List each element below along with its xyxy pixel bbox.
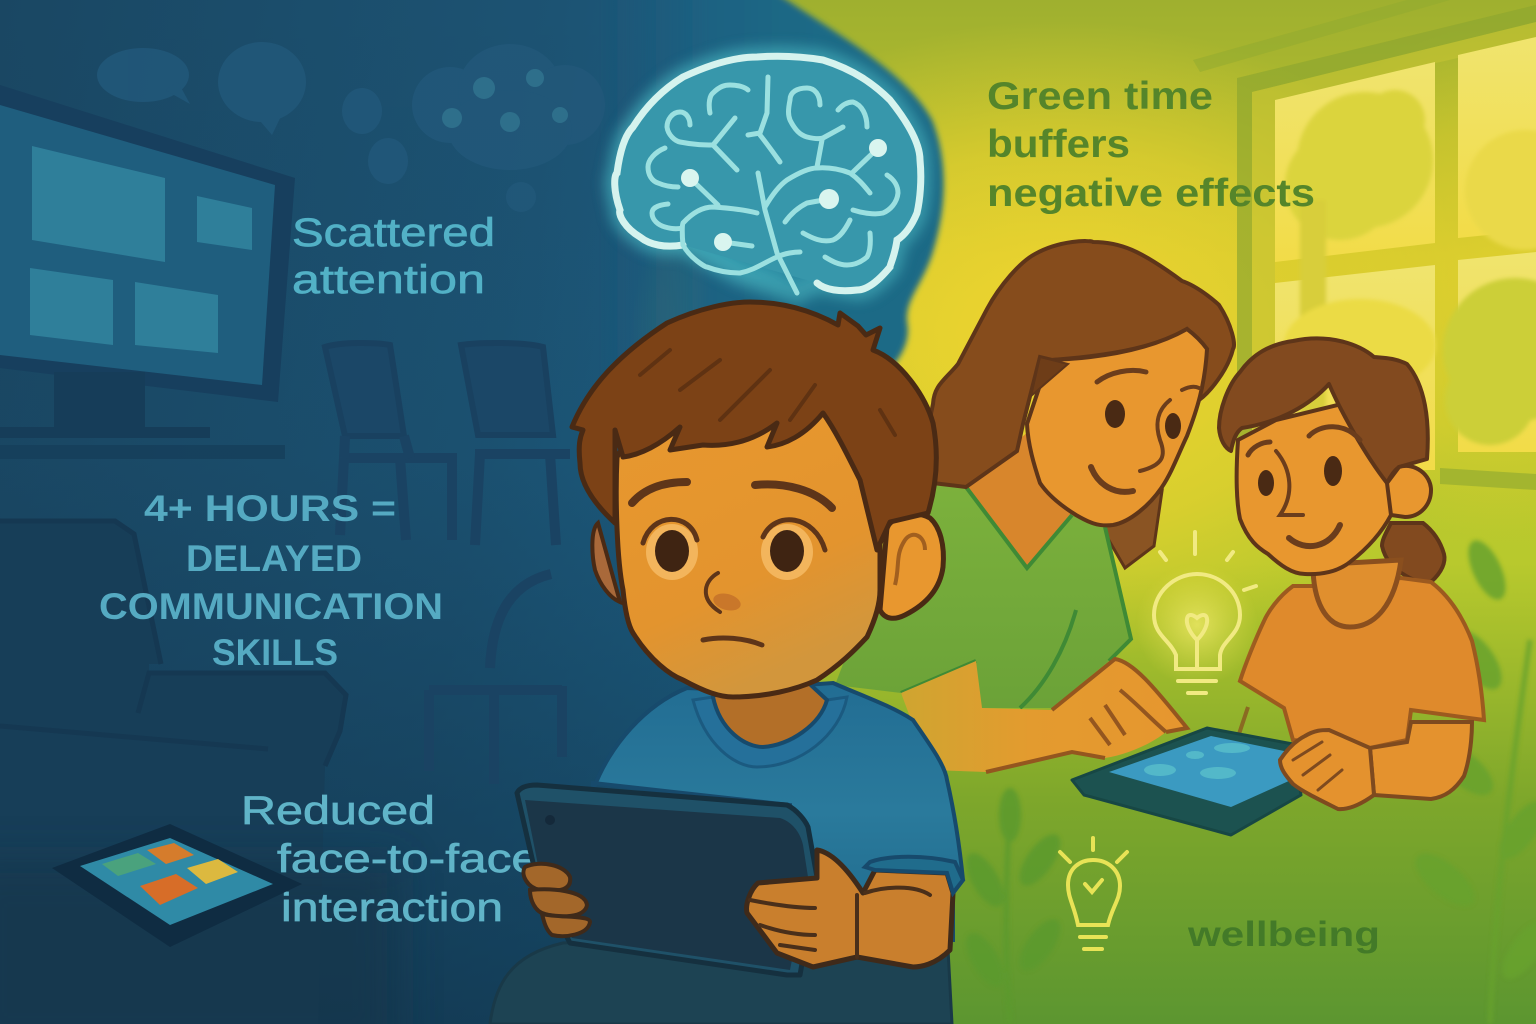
text: scattered attention	[292, 211, 495, 302]
girl: hand over tablet	[1280, 730, 1374, 809]
mother: face	[1027, 329, 1207, 525]
text: reduced face-to-face interaction	[241, 789, 539, 930]
garden trees	[1284, 90, 1536, 480]
brain: nodes	[681, 139, 887, 251]
mother: shirt	[835, 483, 1131, 708]
mother	[835, 241, 1234, 772]
shared tablet	[1072, 728, 1301, 835]
text: scattered attention: attention	[292, 258, 485, 302]
mother: eyes	[1105, 400, 1181, 439]
text: 4+ hours delayed communication skills	[99, 488, 443, 673]
window sill	[1440, 468, 1536, 490]
text: green time buffers negative effects	[987, 75, 1315, 215]
boy: collar	[693, 697, 847, 767]
boy: left ear	[592, 523, 620, 602]
television screen panels	[30, 146, 252, 353]
text: reduced face-to-face interaction: face-to-face	[277, 837, 539, 881]
thought bubbles	[97, 42, 605, 212]
girl: neck and collar	[1313, 560, 1401, 627]
brain: folds	[648, 77, 898, 293]
icon: glowing brain	[615, 56, 921, 293]
window with garden view	[1193, 0, 1536, 490]
mother: brows, nose, mouth	[1091, 370, 1199, 492]
window beam	[1193, 0, 1450, 72]
girl: face	[1237, 400, 1395, 574]
mother: back hair right	[1100, 491, 1162, 568]
left room: television	[0, 85, 295, 459]
bubble dots	[442, 69, 568, 132]
icon: tablet on the table	[52, 824, 302, 947]
text: green time buffers negative effects: buffers	[987, 123, 1130, 166]
boy: shirt	[593, 683, 963, 940]
background: dark blue side	[0, 0, 900, 1024]
left room: sofa	[0, 521, 400, 1024]
left room: chairs	[325, 343, 570, 784]
text: 4+ hours delayed communication skills: COMMUNICATION	[99, 586, 443, 627]
mother: hair	[928, 241, 1234, 487]
boy: eyebrows	[632, 482, 832, 508]
plants	[959, 535, 1536, 1024]
girl: eyes	[1258, 456, 1342, 496]
girl: hair	[1219, 338, 1428, 483]
boy	[490, 302, 963, 1024]
icon: lightbulb near wellbeing	[1060, 838, 1127, 949]
boy: legs	[490, 930, 952, 1024]
boy: hair	[572, 302, 936, 550]
text: green time buffers negative effects: negative effects	[987, 172, 1315, 215]
girl	[1219, 338, 1484, 799]
text: wellbeing: wellbeing	[1187, 915, 1380, 954]
girl: ear	[1387, 466, 1431, 517]
window panes	[1275, 37, 1536, 470]
boy: neck	[713, 675, 827, 747]
text: reduced face-to-face interaction: Reduced	[241, 789, 435, 833]
boy: right arm and hand	[747, 850, 963, 967]
blue silhouette behind brain	[600, 0, 944, 400]
text: 4+ hours delayed communication skills: SKILLS	[212, 632, 338, 673]
boy: mouth	[703, 638, 762, 645]
boy: head	[616, 400, 880, 697]
girl: arm	[1370, 722, 1472, 799]
text: reduced face-to-face interaction: interaction	[281, 886, 503, 930]
text: green time buffers negative effects: Green time	[987, 75, 1213, 118]
girl: shirt	[1240, 578, 1484, 748]
girl: brows, nose, mouth	[1248, 427, 1360, 546]
text: 4+ hours delayed communication skills: DELAYED	[186, 538, 362, 579]
girl: ponytail	[1382, 523, 1444, 582]
boy: left hand	[523, 864, 590, 936]
television stand	[0, 372, 210, 438]
background: bright green side	[630, 0, 1536, 1024]
text: 4+ hours delayed communication skills: 4+ HOURS =	[144, 488, 396, 529]
boy: eyes	[643, 519, 825, 580]
mother: neck	[966, 430, 1072, 568]
boy: nose	[706, 573, 743, 613]
boy: tablet	[517, 785, 817, 975]
text: scattered attention: Scattered	[292, 211, 495, 255]
mother: arm and pointing hand	[901, 659, 1187, 772]
icon: lightbulb above family tablet	[1135, 532, 1259, 693]
boy: right ear	[880, 514, 943, 618]
